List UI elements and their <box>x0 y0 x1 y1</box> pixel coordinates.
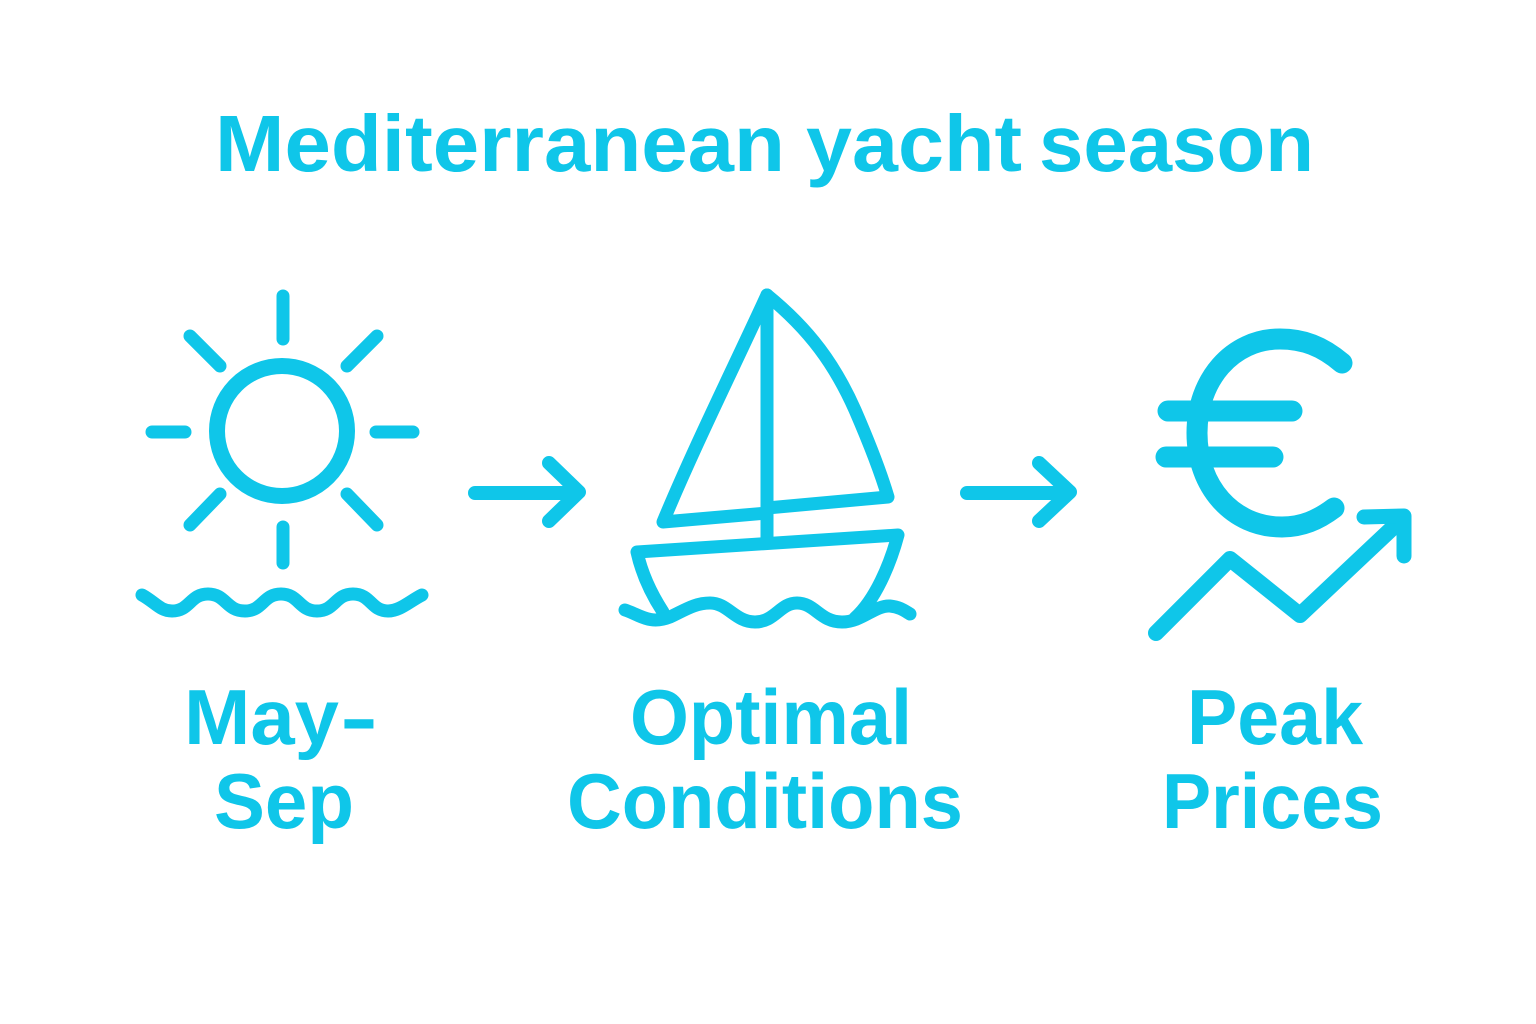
label: May-Sep: - <box>340 673 378 761</box>
arrow: boat to euro <box>967 463 1070 521</box>
label: May-Sep <box>184 673 378 845</box>
label: Peak Prices <box>1162 673 1383 845</box>
title: Mediterranean <box>215 99 785 188</box>
icon: euro with rising trend <box>1156 339 1404 633</box>
icon: sun over waves <box>142 296 422 611</box>
title: season <box>1039 99 1314 188</box>
label: Optimal Conditions: Conditions <box>567 757 963 845</box>
label: May-Sep: Sep <box>214 757 354 845</box>
label: Optimal Conditions <box>567 673 963 845</box>
label: Peak Prices: Prices <box>1162 757 1383 845</box>
title: yacht <box>806 99 1022 188</box>
label: Optimal Conditions: Optimal <box>630 673 912 761</box>
icon: sailboat <box>625 295 910 622</box>
arrow: sun to boat <box>475 463 579 521</box>
title <box>215 99 1314 188</box>
label: May-Sep: May <box>184 673 339 761</box>
label: Peak Prices: Peak <box>1187 673 1364 761</box>
